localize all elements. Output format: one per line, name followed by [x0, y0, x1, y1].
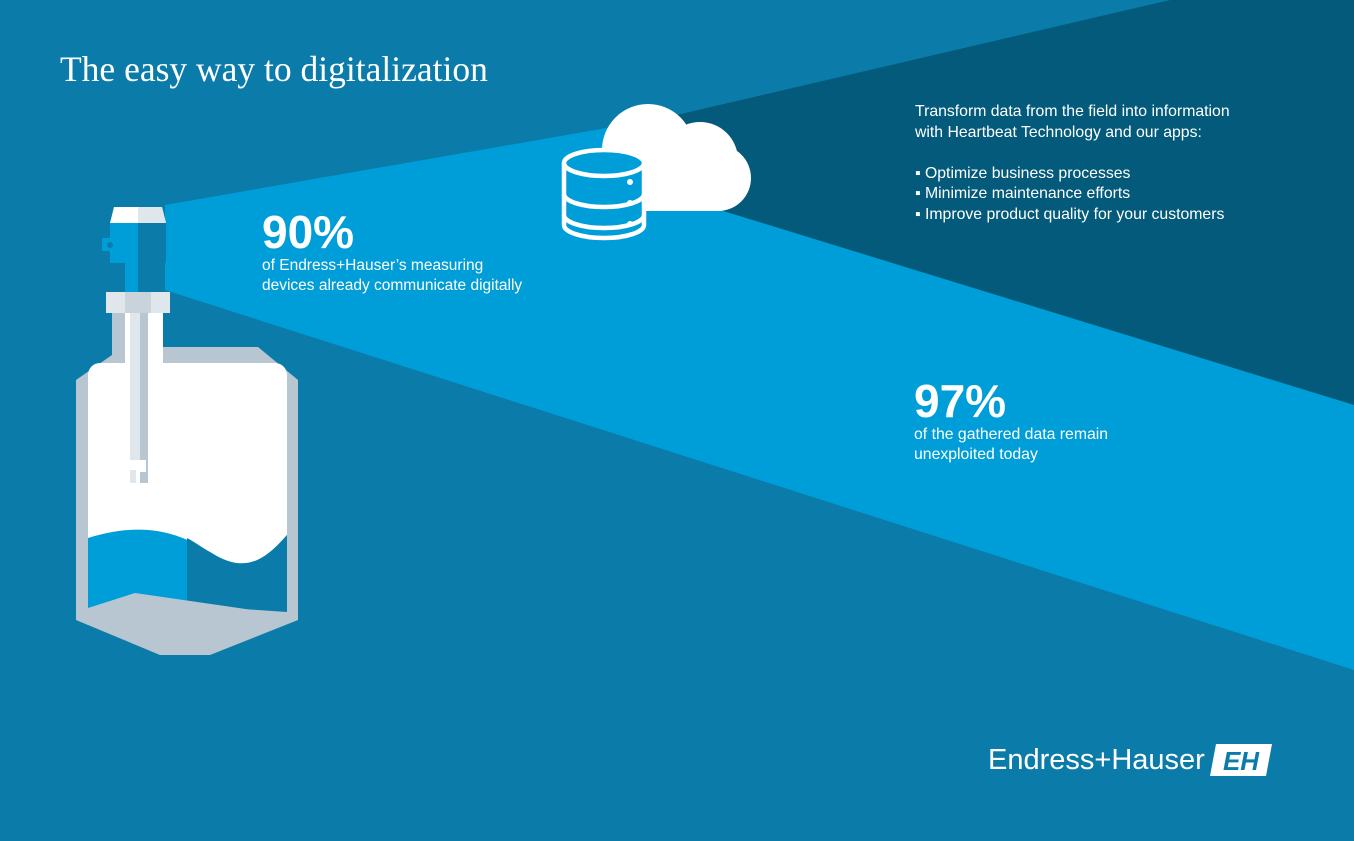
stat: 97%: 97%: [914, 375, 1006, 427]
stat: 97%: [914, 375, 1108, 463]
stat: 90%: devices already communicate digitally: [262, 277, 522, 294]
beam: light data beam: [165, 0, 1354, 670]
text block: heartbeat technology: ▪ Improve product quality for your customers: [915, 206, 1224, 222]
beam: dark information wedge: [660, 0, 1354, 405]
icon: database: [564, 150, 644, 240]
stat: 90%: [262, 206, 522, 294]
text block: heartbeat technology: ▪ Minimize maintenance efforts: [915, 185, 1130, 202]
stat: 97%: of the gathered data remain: [914, 426, 1108, 443]
title: The easy way to digitalization: [60, 49, 488, 89]
text block: heartbeat technology: Transform data from the field into information: [915, 103, 1230, 120]
illustration: tank with level sensor: [76, 207, 298, 655]
text block: heartbeat technology: [915, 103, 1230, 222]
stat: 90%: 90%: [262, 206, 354, 258]
text block: heartbeat technology: ▪ Optimize business processes: [915, 164, 1130, 182]
stat: 90%: of Endress+Hauser’s measuring: [262, 257, 483, 274]
logo: Endress+Hauser: Endress+Hauser: [988, 744, 1205, 776]
text block: heartbeat technology: with Heartbeat Technology and our apps:: [915, 124, 1202, 140]
stat: 97%: unexploited today: [914, 446, 1038, 463]
icon: cloud: [602, 104, 751, 211]
text: EH: [1223, 746, 1260, 776]
